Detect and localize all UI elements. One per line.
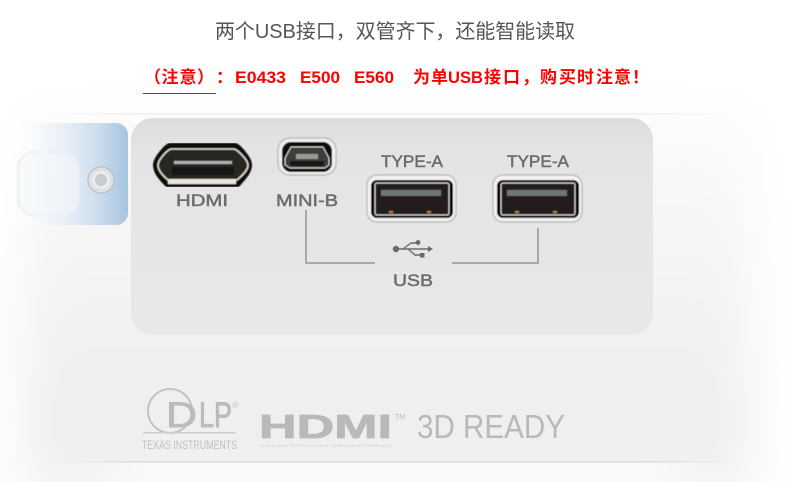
red underline [143,93,216,94]
label: USB: USB [393,271,433,290]
logo: DLP Texas Instruments: D [166,396,197,435]
label: TYPE-A left: TYPE-A [381,152,444,171]
icon: mini-B port [278,138,336,175]
notice models and warning: E500 [300,68,340,87]
title: 两个USB接口，双管齐下，还能智能读取 [215,20,575,43]
icon: USB port right [493,175,582,222]
logo: HDMI: TM [395,414,405,421]
notice models and warning: 接口，购买时注意！ [484,67,649,87]
logo: DLP Texas Instruments: TEXAS INSTRUMENTS [142,438,237,452]
notice models and warning: USB [448,68,483,87]
logo: HDMI: HDMI [259,408,392,445]
logo: DLP Texas Instruments: LP [199,396,232,435]
label: MINI-B: MINI-B [276,191,338,210]
icon: USB symbol [393,240,433,258]
label: HDMI: HDMI [176,191,228,210]
logo text: 3D READY: 3D READY [417,408,565,445]
panel: port panel [131,118,653,335]
panel: blue VGA port section [0,123,128,225]
notice models and warning [235,67,649,87]
label: TYPE-A right: TYPE-A [507,152,570,171]
icon: USB port left [367,175,456,222]
projector body background [25,112,750,482]
notice text: （注意）： [144,67,233,87]
logo: DLP Texas Instruments [142,389,239,452]
icon: thumb screw [88,167,114,193]
notice models and warning: E560 [354,68,394,87]
notice models and warning: E0433 [235,68,286,87]
notice models and warning: 为单 [413,68,448,87]
connector line: left [306,210,375,263]
icon: HDMI port [155,145,250,185]
logo: HDMI: HIGH DEFINITION MULTIMEDIA INTERFACE [260,443,394,448]
logo: HDMI [259,408,405,448]
logo: DLP Texas Instruments: ® [232,400,239,410]
connector line: right [452,228,538,263]
